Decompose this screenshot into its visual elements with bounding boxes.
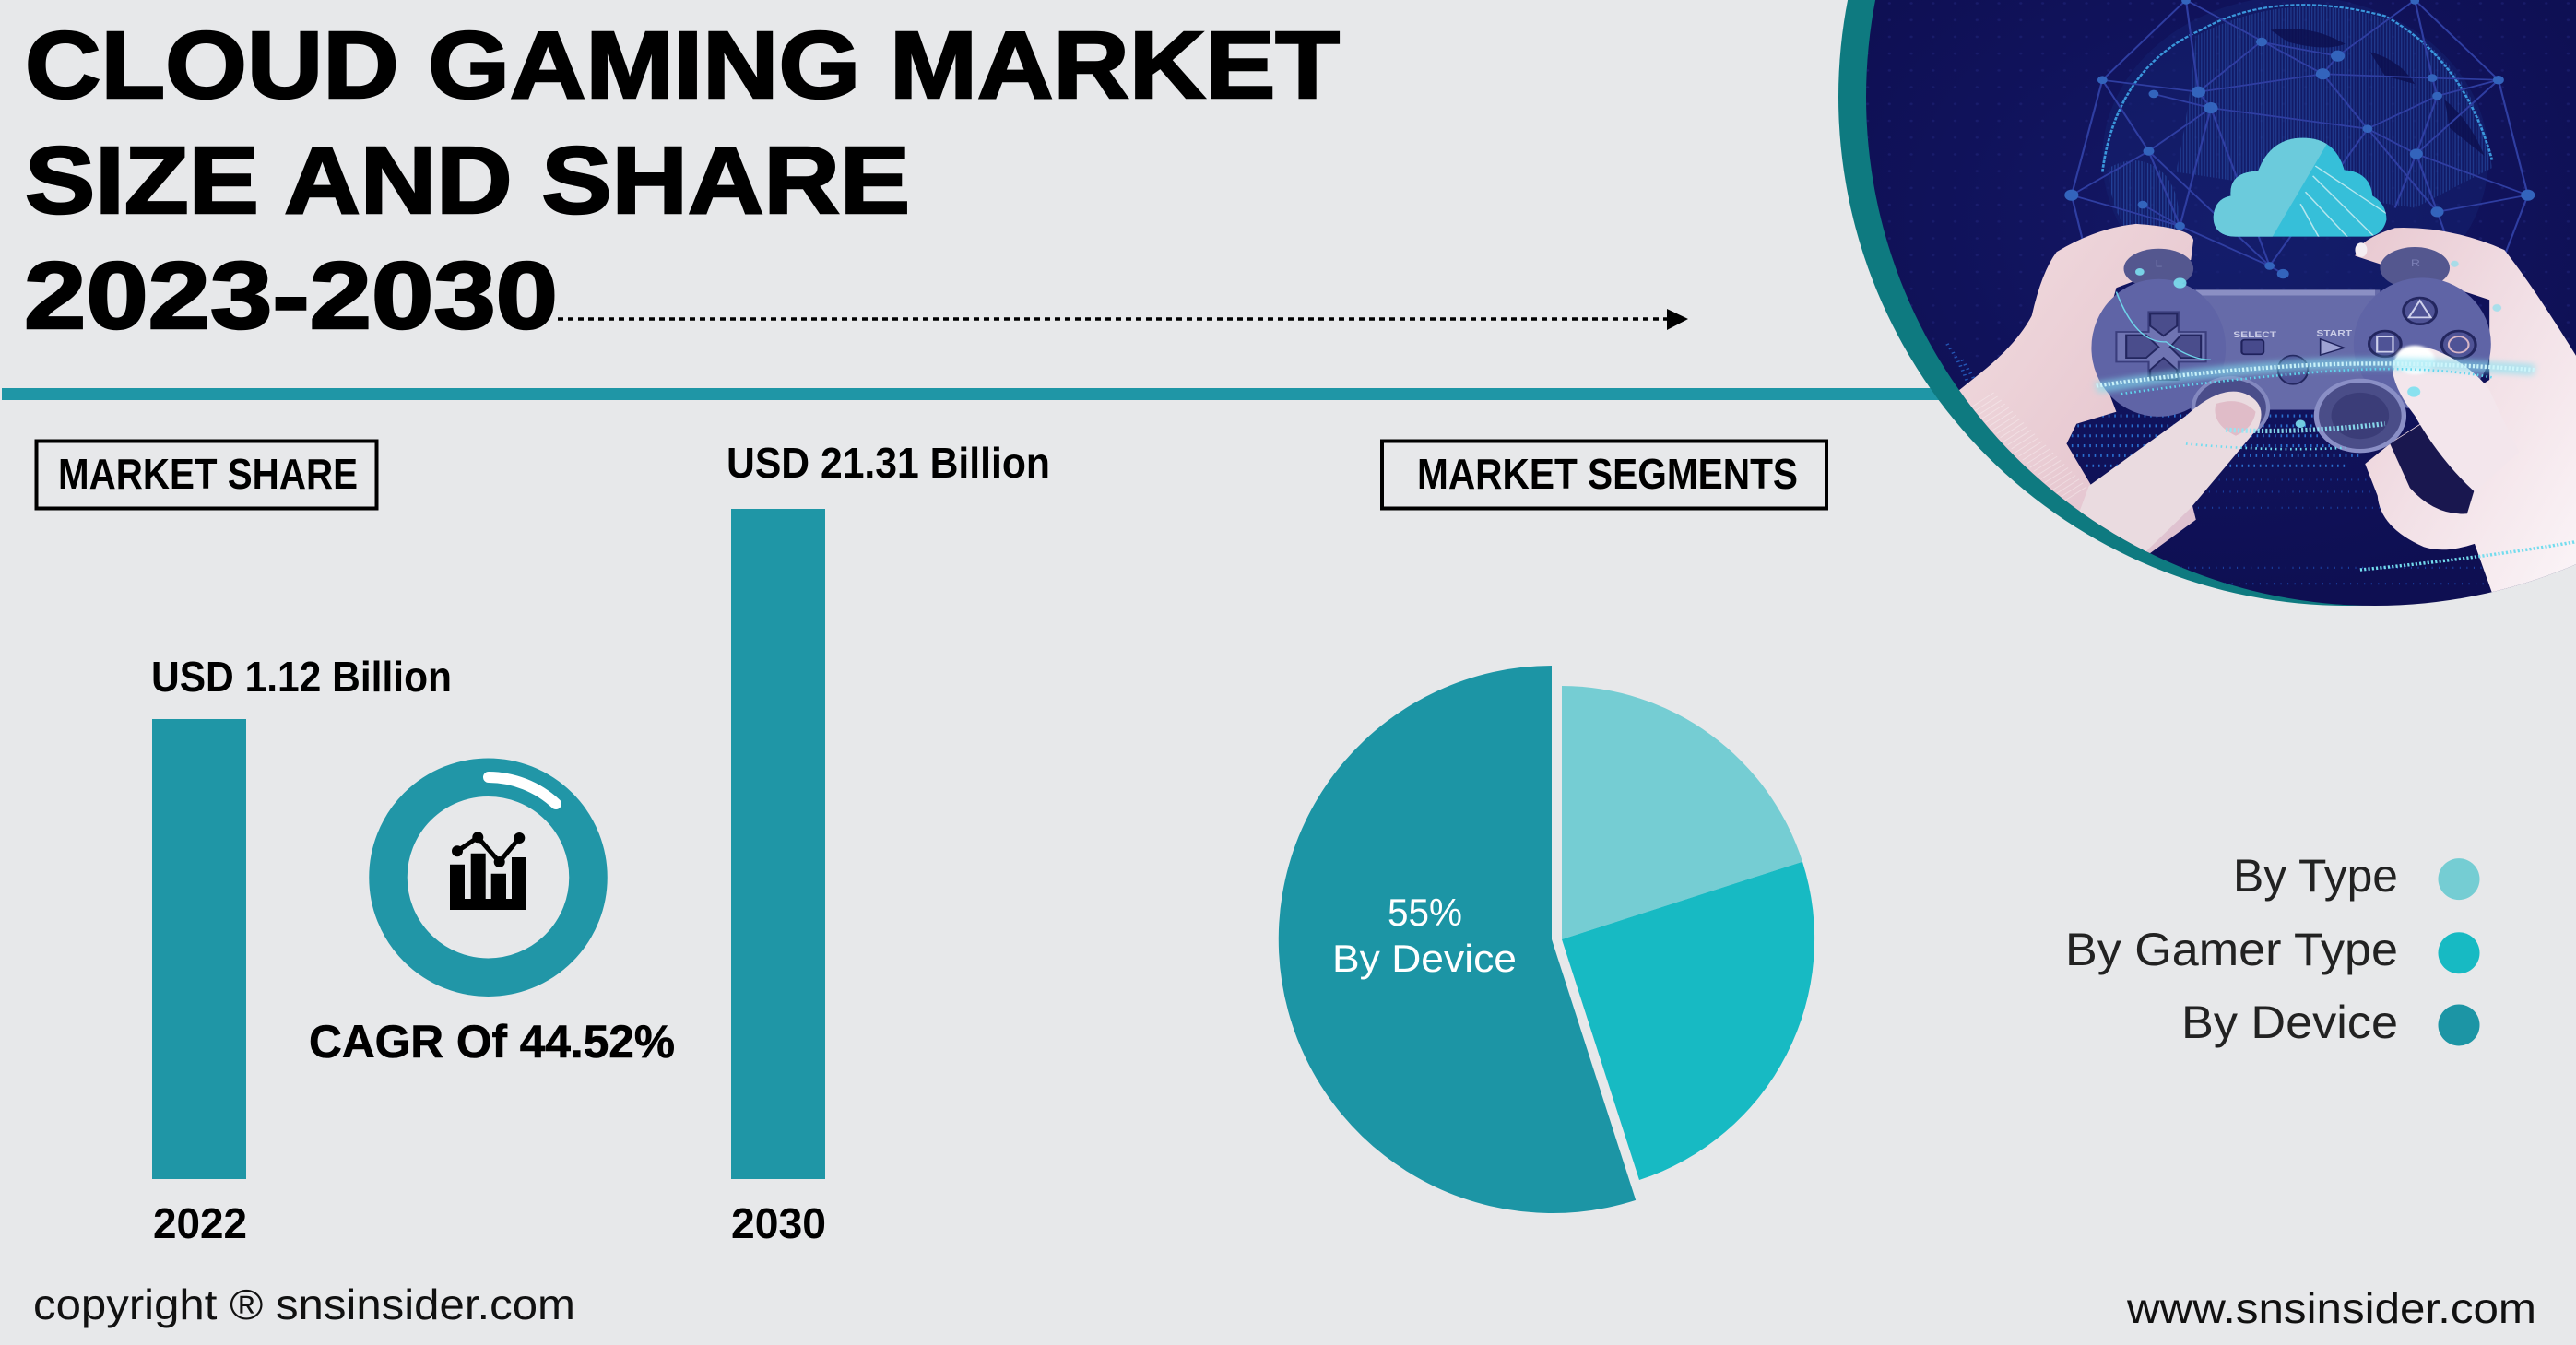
bar 2022: 2022 <box>153 1199 247 1247</box>
panel: photo medallion <box>1798 0 2576 619</box>
fingertips <box>2355 242 2367 257</box>
legend: By Gamer Type <box>2065 924 2398 975</box>
legend: By Type <box>2233 850 2398 902</box>
dark controller handle <box>2390 424 2475 514</box>
heading: market share: MARKET SHARE <box>58 450 358 498</box>
bar 2030: USD 21.31 Billion <box>727 439 1050 487</box>
title: 2023-2030 <box>24 242 558 348</box>
pie chart <box>1279 666 1814 1213</box>
footer: website: www.snsinsider.com <box>2126 1284 2536 1332</box>
teal crescent <box>1838 0 2576 606</box>
right thumb <box>2392 348 2489 491</box>
arrow: dotted timeline <box>558 309 1688 330</box>
bar 2030: 2030 <box>731 1199 826 1247</box>
title: SIZE AND SHARE <box>25 127 910 233</box>
bar 2022 <box>151 653 452 1247</box>
photo: hands holding game controller under cloud and globe <box>1798 0 2576 619</box>
title: CLOUD GAMING MARKET <box>25 12 1340 118</box>
right hand: back of hand and fingers <box>2355 228 2576 600</box>
pie chart: 55% <box>1388 891 1462 934</box>
icon: growth chart <box>450 832 526 910</box>
particle field below controller <box>1947 344 2385 466</box>
network mesh <box>2072 0 2528 274</box>
header divider bar <box>2 388 2576 400</box>
CAGR ring <box>388 777 588 977</box>
pie chart: By Device <box>1332 937 1517 980</box>
title <box>24 12 1340 348</box>
footer: copyright: copyright ® snsinsider.com <box>33 1280 575 1328</box>
game controller <box>2091 247 2491 451</box>
heading: market segments: MARKET SEGMENTS <box>1417 450 1798 498</box>
game controller: START <box>2316 328 2353 338</box>
globe <box>2102 0 2492 320</box>
glow streaks across controller <box>1982 292 2576 570</box>
cloud icon <box>2213 138 2386 237</box>
CAGR label: CAGR Of 44.52% <box>309 1016 675 1068</box>
heading: market segments <box>1382 441 1826 509</box>
legend: By Device <box>2181 997 2398 1048</box>
bar 2030 <box>727 439 1050 1247</box>
game controller: R <box>2411 256 2420 269</box>
panel: market share <box>37 439 1050 1247</box>
left hand: back of hand <box>1947 224 2196 568</box>
legend <box>2065 850 2480 1048</box>
left thumb <box>2076 392 2262 554</box>
bar 2022: USD 1.12 Billion <box>151 653 452 701</box>
heading: market share <box>37 441 376 509</box>
panel: market segments <box>1279 441 2480 1213</box>
game controller: SELECT <box>2233 330 2277 340</box>
game controller: L <box>2156 257 2162 269</box>
